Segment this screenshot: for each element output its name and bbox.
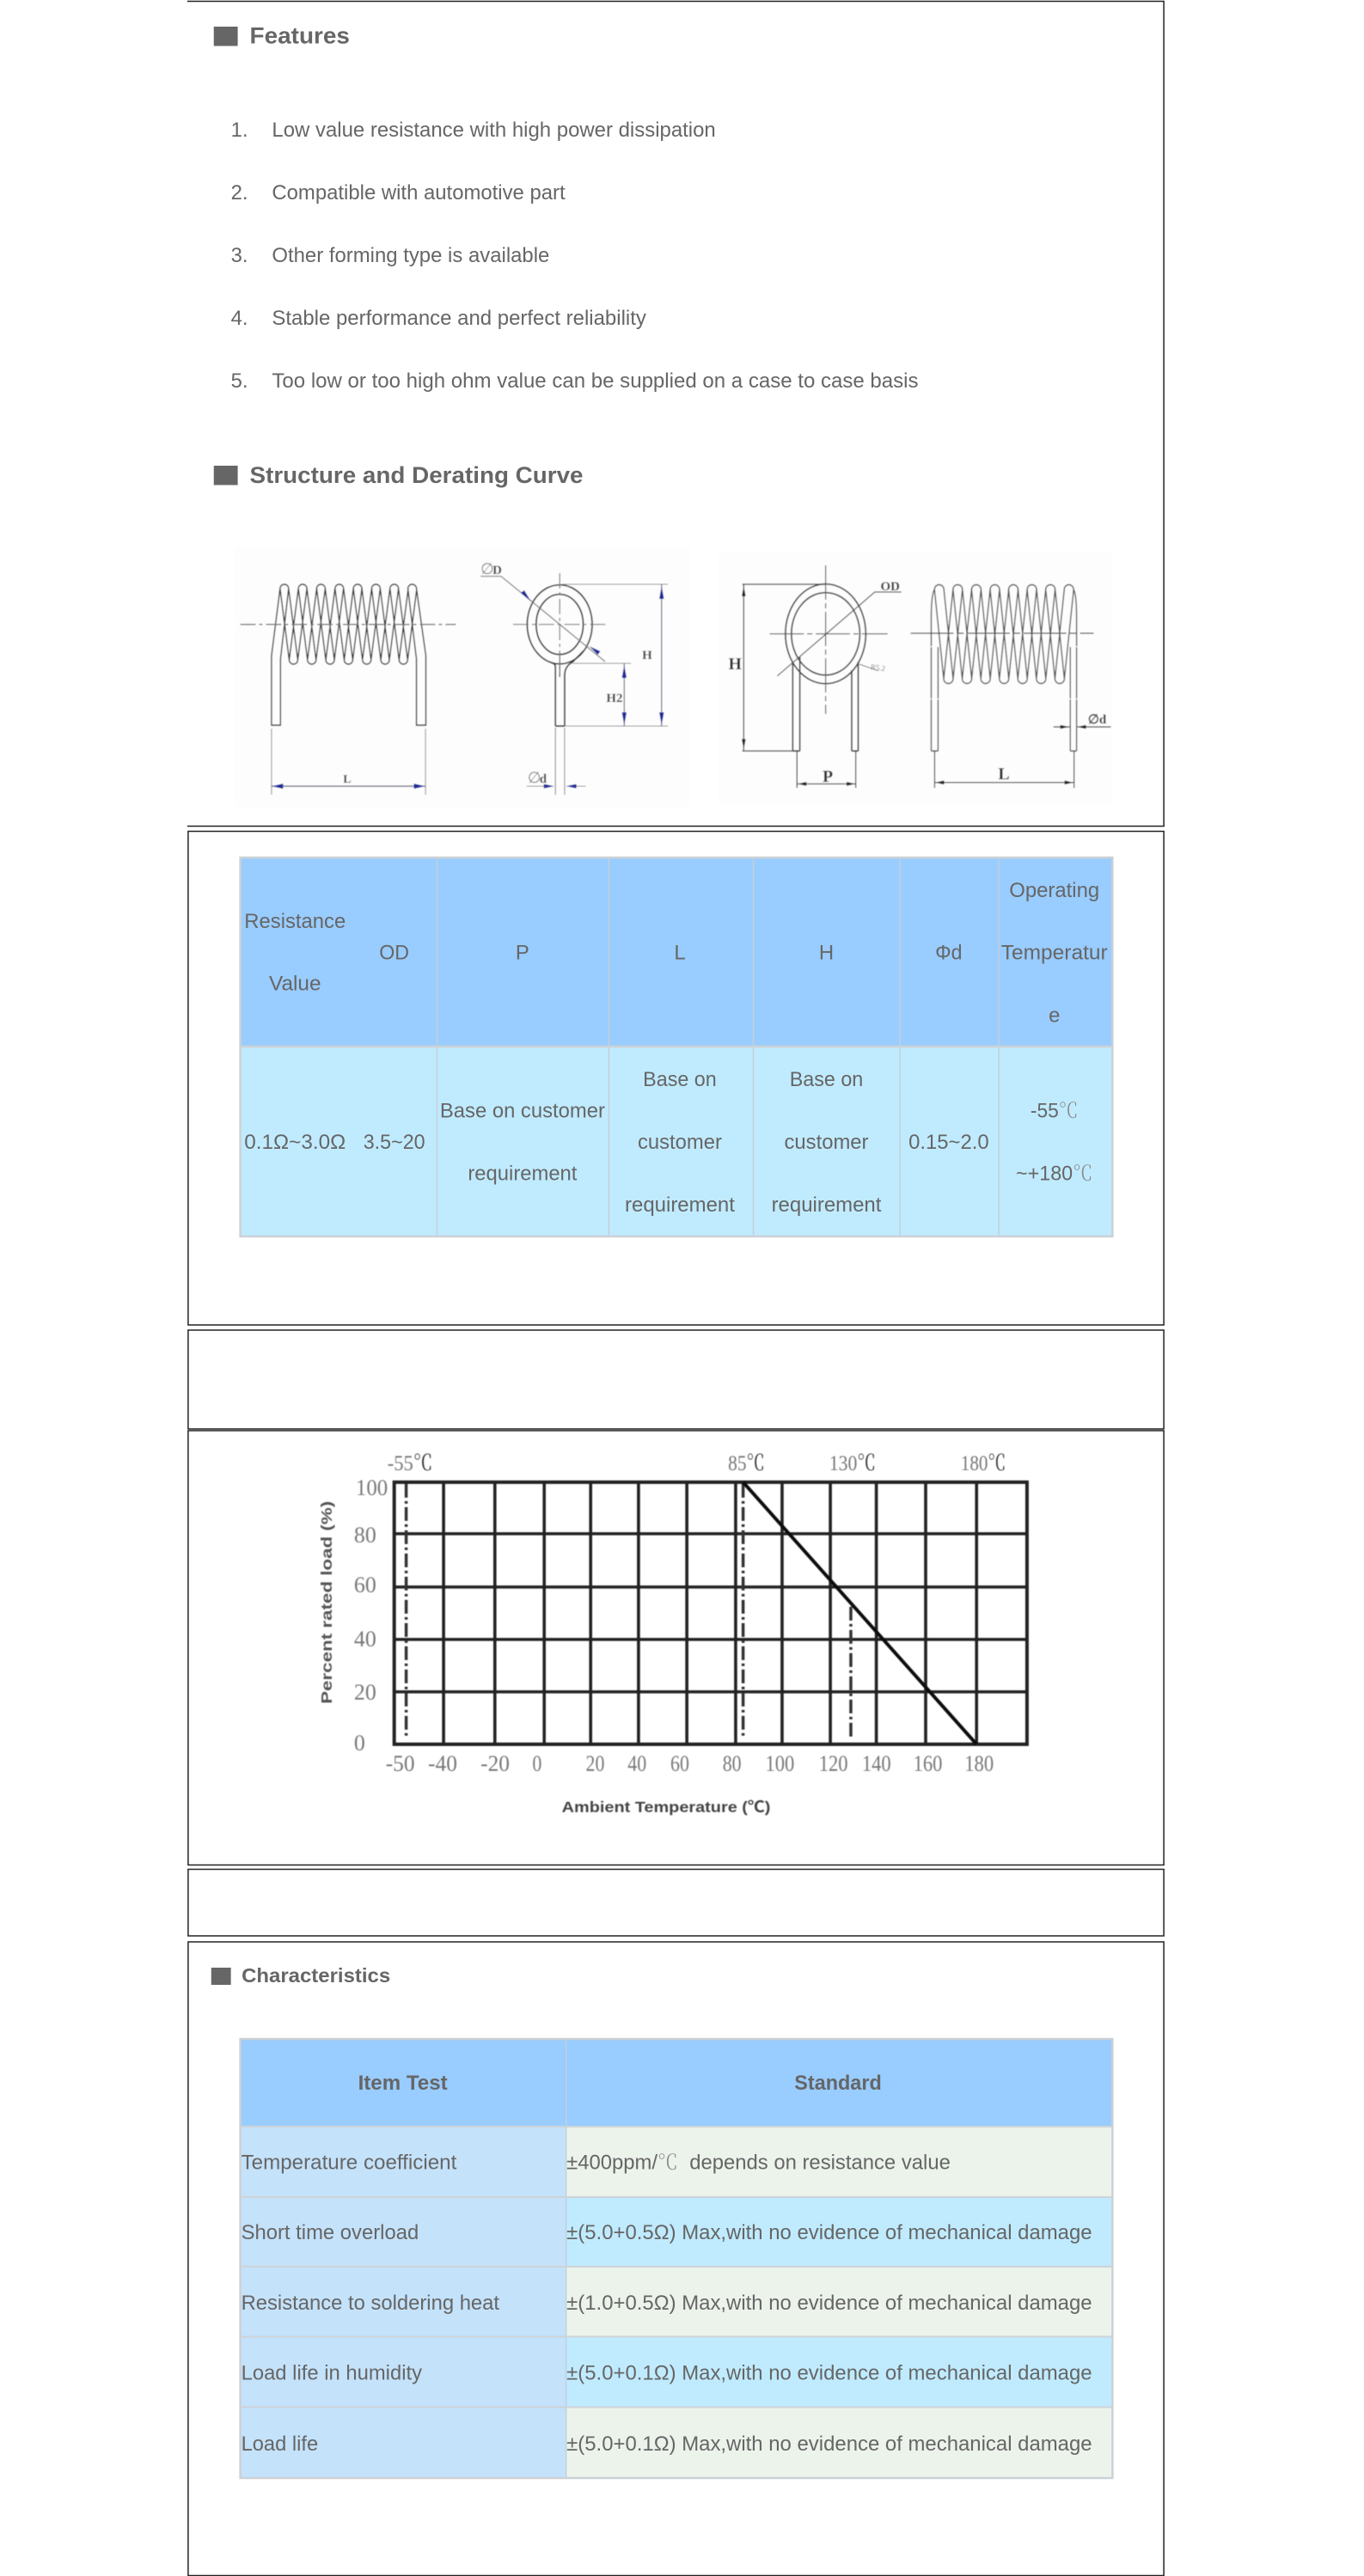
table body values: requirement [625,1193,735,1217]
labels end view [729,580,900,786]
table rows: Load life in humidity [242,2361,422,2385]
labels on end view [480,560,652,786]
table rows: Load life [242,2433,318,2456]
panel: empty spacer 2 [188,1870,1164,1936]
labels side view: ∅d [1088,713,1107,727]
table rows: ±(5.0+0.5Ω) Max,with no evidence of mechanical damage [566,2221,1092,2244]
x axis ticks: -20 [480,1751,510,1776]
end view [742,565,902,788]
labels on end view: ∅ [480,560,494,577]
labels end view: R5.2 [870,662,886,673]
panel: characteristics [188,1942,1164,2576]
x axis ticks [386,1751,994,1776]
table header labels: Resistance [244,910,346,933]
x axis ticks: 120 [819,1751,848,1776]
x axis ticks: 0 [532,1751,541,1776]
diagram: radial coil drawing, side and end views [235,547,690,808]
y axis ticks: 60 [354,1572,376,1597]
labels on end view: ∅ [528,769,541,786]
x axis ticks: 180 [964,1751,994,1776]
characteristics table [240,2038,1113,2478]
table body values: 0.1Ω~3.0Ω [244,1131,346,1154]
labels on end view: D [492,564,502,577]
table body values: ~+180℃ [1016,1156,1093,1187]
table rows: ±(5.0+0.1Ω) Max,with no evidence of mechanical damage [566,2361,1092,2385]
features list: Stable performance and perfect reliability [272,307,646,330]
top temperature labels: 85℃ [728,1446,765,1477]
body row background [240,1047,1113,1236]
table rows: Resistance to soldering heat [242,2292,499,2315]
top temperature labels [388,1446,1006,1477]
y axis ticks: 40 [354,1627,376,1651]
table header: Item Test [358,2072,448,2095]
labels side view: L [998,765,1010,784]
table header labels: e [1049,1004,1060,1028]
table body values: -55℃ [1031,1093,1079,1124]
x axis ticks: 20 [586,1751,604,1776]
y axis ticks: 100 [356,1475,388,1500]
table header [358,2072,882,2095]
table rows: ±400ppm/℃ depends on resistance value [566,2145,951,2176]
features list: 2. [231,181,248,204]
features list: 5. [231,369,248,393]
table body values: Base on [643,1068,717,1091]
label L: L [343,773,352,786]
table rows: Short time overload [242,2221,419,2244]
y axis ticks: 80 [354,1523,376,1547]
x axis title: Ambient Temperature (℃) [562,1798,770,1816]
table rows [242,2145,1092,2456]
x axis ticks: 60 [670,1751,689,1776]
y axis title: Percent rated load (%) [318,1501,335,1704]
derating chart [318,1446,1027,1816]
x axis ticks: 40 [627,1751,646,1776]
y axis ticks [354,1475,388,1755]
features list: Other forming type is available [272,244,549,267]
labels on end view: H [642,649,652,662]
table rows: ±(5.0+0.1Ω) Max,with no evidence of mechanical damage [566,2433,1092,2456]
table body values: customer [638,1131,722,1154]
top temperature labels: 180℃ [961,1446,1006,1477]
table body values: Base on [790,1068,863,1091]
panel: derating curve [188,1431,1164,1865]
panel: empty spacer [188,1330,1164,1429]
labels on end view: d [540,772,547,786]
features list: Too low or too high ohm value can be supplied on a case to case basis [272,369,919,393]
table header labels: Value [269,972,321,995]
x axis ticks: 100 [765,1751,794,1776]
heading: Characteristics: Characteristics [242,1964,390,1987]
table rows: Temperature coefficient [242,2151,457,2175]
labels end view: P [823,767,833,786]
table header labels: L [674,942,686,965]
labels end view: OD [881,580,900,594]
header row background [240,857,1113,1047]
table body values: customer [784,1131,869,1154]
table body values: requirement [772,1193,882,1217]
panel: dimensions table [188,832,1164,1325]
dimensions table [240,857,1113,1236]
table header labels: OD [379,942,409,965]
diagram: axial coil drawing, end and side views [718,552,1111,803]
side view [911,585,1110,788]
table header labels: P [516,942,529,965]
labels end view: H [729,655,742,674]
table body values: requirement [468,1162,578,1186]
table header labels: Operating [1009,879,1099,902]
table body values [244,1068,1093,1217]
table header: Standard [794,2072,882,2095]
x axis ticks: 80 [723,1751,742,1776]
table rows: ±(1.0+0.5Ω) Max,with no evidence of mechanical damage [566,2292,1092,2315]
table header labels: H [819,942,834,965]
table header labels: Φd [935,942,963,965]
table body values: Base on customer [440,1099,605,1123]
features list: 4. [231,307,248,330]
coil end view [480,573,668,795]
features list: 1. [231,119,248,142]
features list [231,119,919,393]
panel: features and structure [187,2,1164,827]
x axis ticks: -50 [386,1751,415,1776]
y axis ticks: 20 [354,1680,376,1705]
labels side view [998,713,1107,784]
coil side view [241,584,456,795]
derating line [743,1482,976,1744]
heading: Structure and Derating Curve: Structure and Derating Curve [250,462,584,488]
table backgrounds [240,2038,1113,2478]
features list: 3. [231,244,248,267]
table header labels: Temperatur [1001,942,1108,965]
labels on end view: H2 [606,692,622,705]
x axis ticks: -40 [428,1751,457,1776]
table body values: 3.5~20 [364,1131,425,1154]
top temperature labels: 130℃ [829,1446,876,1477]
table body values: 0.15~2.0 [908,1131,989,1154]
top temperature labels: -55℃ [388,1446,432,1477]
x axis ticks: 140 [862,1751,891,1776]
chart grid [395,1482,1027,1744]
features list: Compatible with automotive part [272,181,566,204]
temperature markers [407,1484,851,1738]
heading: Features: Features [250,22,350,49]
features list: Low value resistance with high power dissipation [272,119,716,142]
y axis ticks: 0 [354,1731,365,1755]
x axis ticks: 160 [914,1751,942,1776]
table header labels [244,879,1108,1028]
